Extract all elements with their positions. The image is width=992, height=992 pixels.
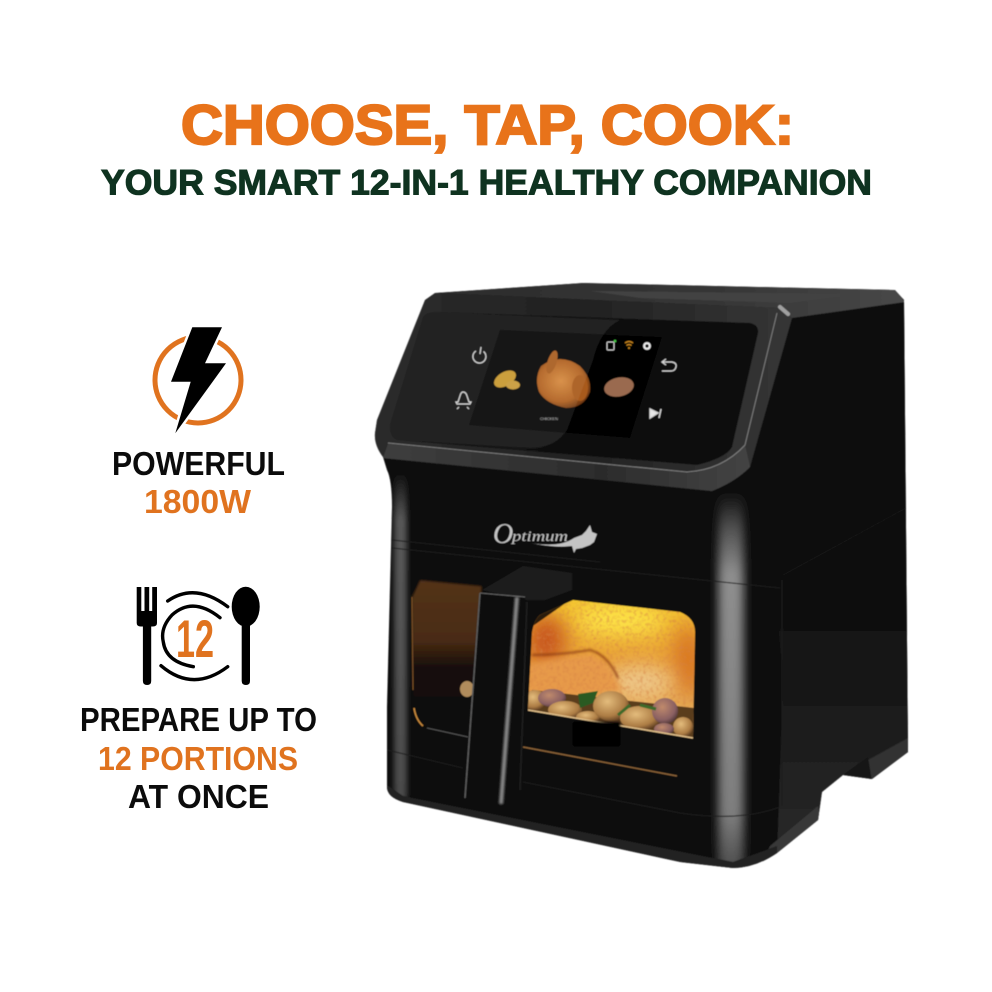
left window [412, 580, 482, 737]
potato left window [460, 681, 474, 697]
screen status icons [607, 340, 650, 350]
air fryer product [370, 275, 915, 875]
feature text: powerful 1800W [112, 445, 285, 520]
potatoes and herbs [524, 689, 694, 740]
feature text: prepare up to 12 portions at once: AT ONCE [128, 778, 269, 815]
screen [469, 330, 662, 438]
left highlight [394, 470, 407, 800]
right vertical highlight [718, 490, 744, 870]
head band [374, 293, 792, 491]
feature text: powerful 1800W: POWERFUL [112, 445, 285, 482]
side base rim [868, 738, 908, 778]
right window with roast chicken [524, 598, 702, 740]
steak on screen [603, 376, 635, 398]
bottom rim [387, 785, 777, 872]
brand logo: O [493, 519, 513, 550]
left window trim [412, 597, 413, 690]
door seam lines [387, 540, 782, 816]
screen label: CHICKEN [540, 416, 558, 421]
side panel faint seam [783, 508, 906, 575]
icon: lightning bolt in circle [155, 327, 241, 433]
chicken on screen [537, 349, 590, 408]
brand logo: ptimum [511, 529, 568, 545]
lower drawer light line [523, 747, 677, 776]
icon: fork, plate and spoon with 12 [137, 587, 260, 685]
nuggets on screen [493, 370, 521, 390]
title: CHOOSE, TAP, COOK: [181, 93, 794, 156]
air fryer body silhouette [370, 275, 915, 875]
control icons [456, 347, 676, 418]
top plate [435, 283, 905, 318]
feature text: prepare up to 12 portions at once: 12 PORTIONS [98, 740, 298, 777]
glass reflection [390, 312, 620, 448]
side panel [776, 298, 908, 839]
drawer tray edge [528, 710, 693, 738]
brand logo [493, 519, 597, 553]
glass panel [390, 312, 758, 465]
feature text: prepare up to 12 portions at once: PREPARE UP TO [80, 701, 317, 738]
feature text: powerful 1800W: 1800W [144, 483, 252, 520]
icon: fork, plate and spoon with 12: 12 [176, 610, 214, 669]
subtitle: YOUR SMART 12-IN-1 HEALTHY COMPANION [101, 164, 872, 202]
door handle [465, 566, 572, 805]
feature text: prepare up to 12 portions at once [80, 701, 317, 815]
